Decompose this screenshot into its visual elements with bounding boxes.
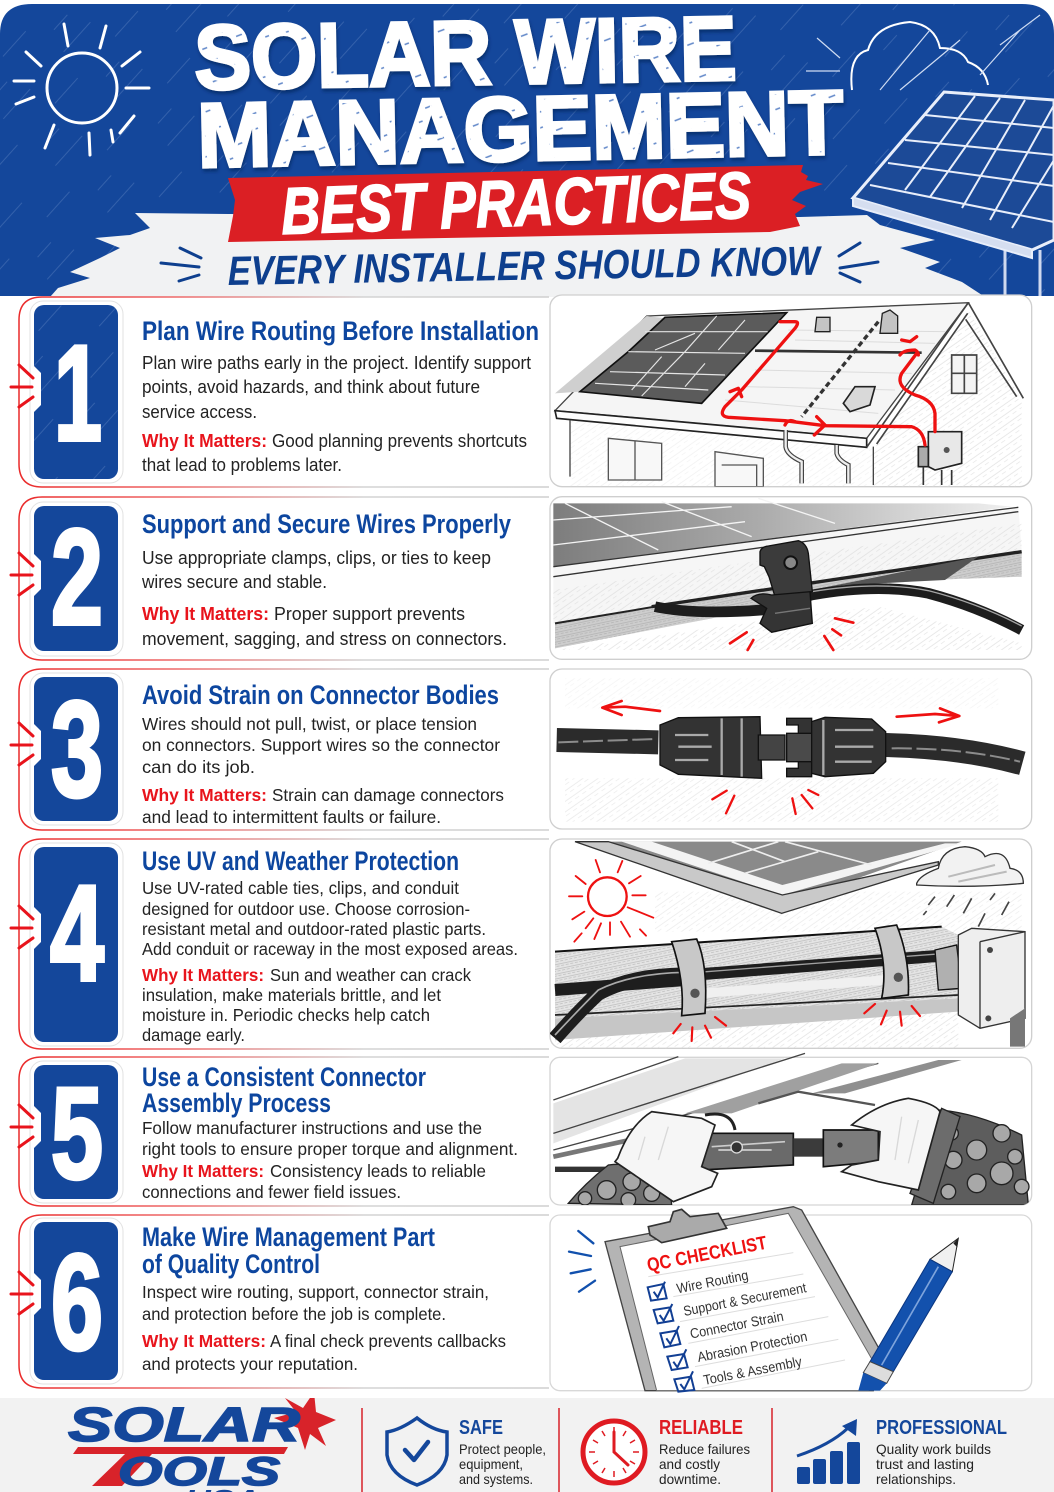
header blue background (0, 4, 1054, 296)
subtitle: EVERY INSTALLER SHOULD KNOW (227, 238, 823, 294)
heading: Plan Wire Routing Before Installation (142, 316, 539, 346)
title: SOLAR WIRE (194, 0, 737, 109)
reliable: Reduce failures (659, 1441, 750, 1457)
blue ray marks (569, 1231, 595, 1292)
description: wires secure and stable. (141, 571, 327, 592)
why it matters: A final check prevents callbacks (270, 1331, 506, 1351)
number badge: 4 (50, 857, 104, 1009)
description: Follow manufacturer instructions and use the (142, 1118, 482, 1138)
checklist sheet: QC CHECKLIST (645, 1233, 769, 1277)
red accent (11, 1105, 33, 1147)
heading: Support and Secure Wires Properly (142, 509, 511, 539)
why it matters (142, 785, 504, 827)
why it matters (142, 1161, 486, 1202)
dividers (362, 1408, 772, 1492)
description (142, 352, 531, 422)
why it matters: Sun and weather can crack (270, 965, 471, 985)
safe: SAFE (459, 1417, 503, 1439)
clipboard clip (648, 1209, 727, 1243)
number badge: 3 (51, 673, 103, 825)
icon: shield (387, 1418, 447, 1485)
checklist sheet: Support & Securement (682, 1279, 808, 1319)
why it matters: insulation, make materials brittle, and let (142, 985, 441, 1005)
red accent (11, 365, 33, 407)
safe: equipment, (459, 1456, 523, 1472)
why it matters: Good planning prevents shortcuts (272, 430, 527, 451)
description: Inspect wire routing, support, connector strain, (142, 1282, 489, 1302)
description: Use UV-rated cable ties, clips, and conduit (142, 878, 459, 898)
illustration: UV and weather protection (550, 839, 1032, 1048)
panel: step 3 (11, 669, 549, 830)
why it matters: damage early. (142, 1025, 245, 1045)
reliable: downtime. (659, 1471, 721, 1487)
description: Add conduit or raceway in the most exposed areas. (142, 939, 518, 959)
white brush stroke (50, 213, 985, 297)
description (141, 547, 491, 592)
red accent (11, 906, 33, 948)
logo: Solar Tools USA: SOLAR (68, 1399, 300, 1452)
why it matters (142, 603, 507, 649)
why it matters: and protects your reputation. (142, 1354, 358, 1374)
why it matters (142, 1331, 506, 1374)
checklist sheet: Abrasion Protection (696, 1328, 809, 1365)
panel: step 4 (11, 839, 549, 1049)
heading (142, 1222, 435, 1279)
description: service access. (142, 401, 257, 422)
title: MANAGEMENT (196, 72, 844, 187)
icon: growth chart (797, 1419, 860, 1484)
professional: PROFESSIONAL (876, 1417, 1007, 1439)
safe: Protect people, (459, 1441, 546, 1457)
card outline (19, 497, 549, 660)
number badge (30, 301, 123, 483)
description: designed for outdoor use. Choose corrosion- (142, 899, 470, 919)
safe (459, 1417, 546, 1487)
why it matters: Why It Matters: (142, 1331, 266, 1351)
description: right tools to ensure proper torque and alignment. (142, 1139, 518, 1159)
number badge: 6 (51, 1226, 103, 1378)
card outline (19, 1215, 549, 1388)
checklist sheet: Tools & Assembly (702, 1353, 803, 1388)
why it matters: connections and fewer field issues. (142, 1182, 401, 1202)
heading: Make Wire Management Part (142, 1222, 435, 1252)
card outline (19, 1057, 549, 1206)
icon: sun (14, 24, 149, 155)
why it matters: Why It Matters: (142, 1161, 264, 1181)
professional: trust and lasting (876, 1456, 974, 1472)
why it matters: that lead to problems later. (142, 454, 342, 475)
red accent (11, 553, 33, 595)
card outline (19, 839, 549, 1049)
reliable: RELIABLE (659, 1417, 743, 1439)
title (194, 0, 844, 187)
illustration: QC checklist clipboard (550, 1207, 1032, 1392)
why it matters: Consistency leads to reliable (270, 1161, 486, 1181)
panel: step 6 (11, 1215, 549, 1388)
description: and protection before the job is complete. (142, 1304, 446, 1324)
professional (876, 1417, 1007, 1487)
why it matters: Why It Matters: (142, 785, 267, 805)
number badge: 5 (51, 1060, 103, 1206)
icon: solar panel (853, 92, 1054, 296)
card outline (19, 297, 549, 487)
heading: of Quality Control (142, 1249, 320, 1279)
subtitle accent marks (161, 243, 878, 282)
safe: and systems. (459, 1471, 533, 1487)
why it matters (142, 965, 471, 1045)
checklist sheet: Wire Routing (675, 1267, 750, 1296)
header banner (0, 0, 1054, 297)
why it matters: Why It Matters: (142, 965, 264, 985)
why it matters: Strain can damage connectors (272, 785, 504, 805)
why it matters: movement, sagging, and stress on connectors. (142, 628, 507, 649)
professional: Quality work builds (876, 1441, 991, 1457)
illustration: roof wire routing (550, 295, 1032, 487)
why it matters: Why It Matters: (142, 430, 267, 451)
card outline (19, 669, 549, 830)
number badge: 1 (54, 317, 102, 469)
checklist sheet: Connector Strain (689, 1308, 785, 1342)
description: can do its job. (142, 757, 255, 777)
number badge (30, 1218, 123, 1384)
footer (0, 1392, 1054, 1492)
panel: step 2 (11, 497, 549, 660)
description: Use appropriate clamps, clips, or ties to keep (142, 547, 491, 568)
icon: clock (583, 1421, 645, 1483)
why it matters: Proper support prevents (274, 603, 465, 624)
heading: Avoid Strain on Connector Bodies (142, 680, 499, 710)
icon: pencil (858, 1238, 958, 1391)
heading: Use UV and Weather Protection (142, 846, 459, 876)
description: Wires should not pull, twist, or place tension (142, 714, 477, 734)
number badge: 2 (51, 501, 103, 653)
number badge (30, 843, 123, 1046)
red banner: best practices: BEST PRACTICES (280, 158, 752, 248)
description: on connectors. Support wires so the connector (142, 735, 500, 755)
why it matters: and lead to intermittent faults or failure. (142, 807, 441, 827)
panel: step 1 (11, 297, 549, 487)
spark lines near cloud (806, 15, 1040, 90)
heading: Use a Consistent Connector (142, 1062, 426, 1092)
why it matters: Why It Matters: (142, 603, 269, 624)
heading: Assembly Process (142, 1088, 331, 1118)
description (142, 714, 500, 777)
illustration: connector strain (550, 669, 1032, 829)
reliable (659, 1417, 750, 1487)
professional: relationships. (876, 1471, 956, 1487)
description: Plan wire paths early in the project. Identify support (142, 352, 531, 373)
footer background (0, 1398, 1054, 1492)
description (142, 1282, 489, 1324)
red accent (11, 1272, 33, 1314)
checklist sheet (620, 1213, 873, 1392)
panel: step 5 (11, 1057, 549, 1206)
description (142, 878, 518, 959)
reliable: and costly (659, 1456, 720, 1472)
illustration: gloved hands assembling connector (550, 1053, 1032, 1207)
why it matters (142, 430, 527, 475)
icon: cloud (851, 22, 988, 90)
red accent (11, 723, 33, 765)
heading (142, 1062, 426, 1118)
logo: Solar Tools USA (68, 1392, 336, 1492)
description: points, avoid hazards, and think about future (142, 376, 480, 397)
why it matters: moisture in. Periodic checks help catch (142, 1005, 430, 1025)
description: resistant metal and outdoor-rated plastic parts. (142, 919, 486, 939)
description (142, 1118, 518, 1159)
illustration: cable clip (550, 497, 1032, 659)
clipboard (605, 1207, 882, 1391)
